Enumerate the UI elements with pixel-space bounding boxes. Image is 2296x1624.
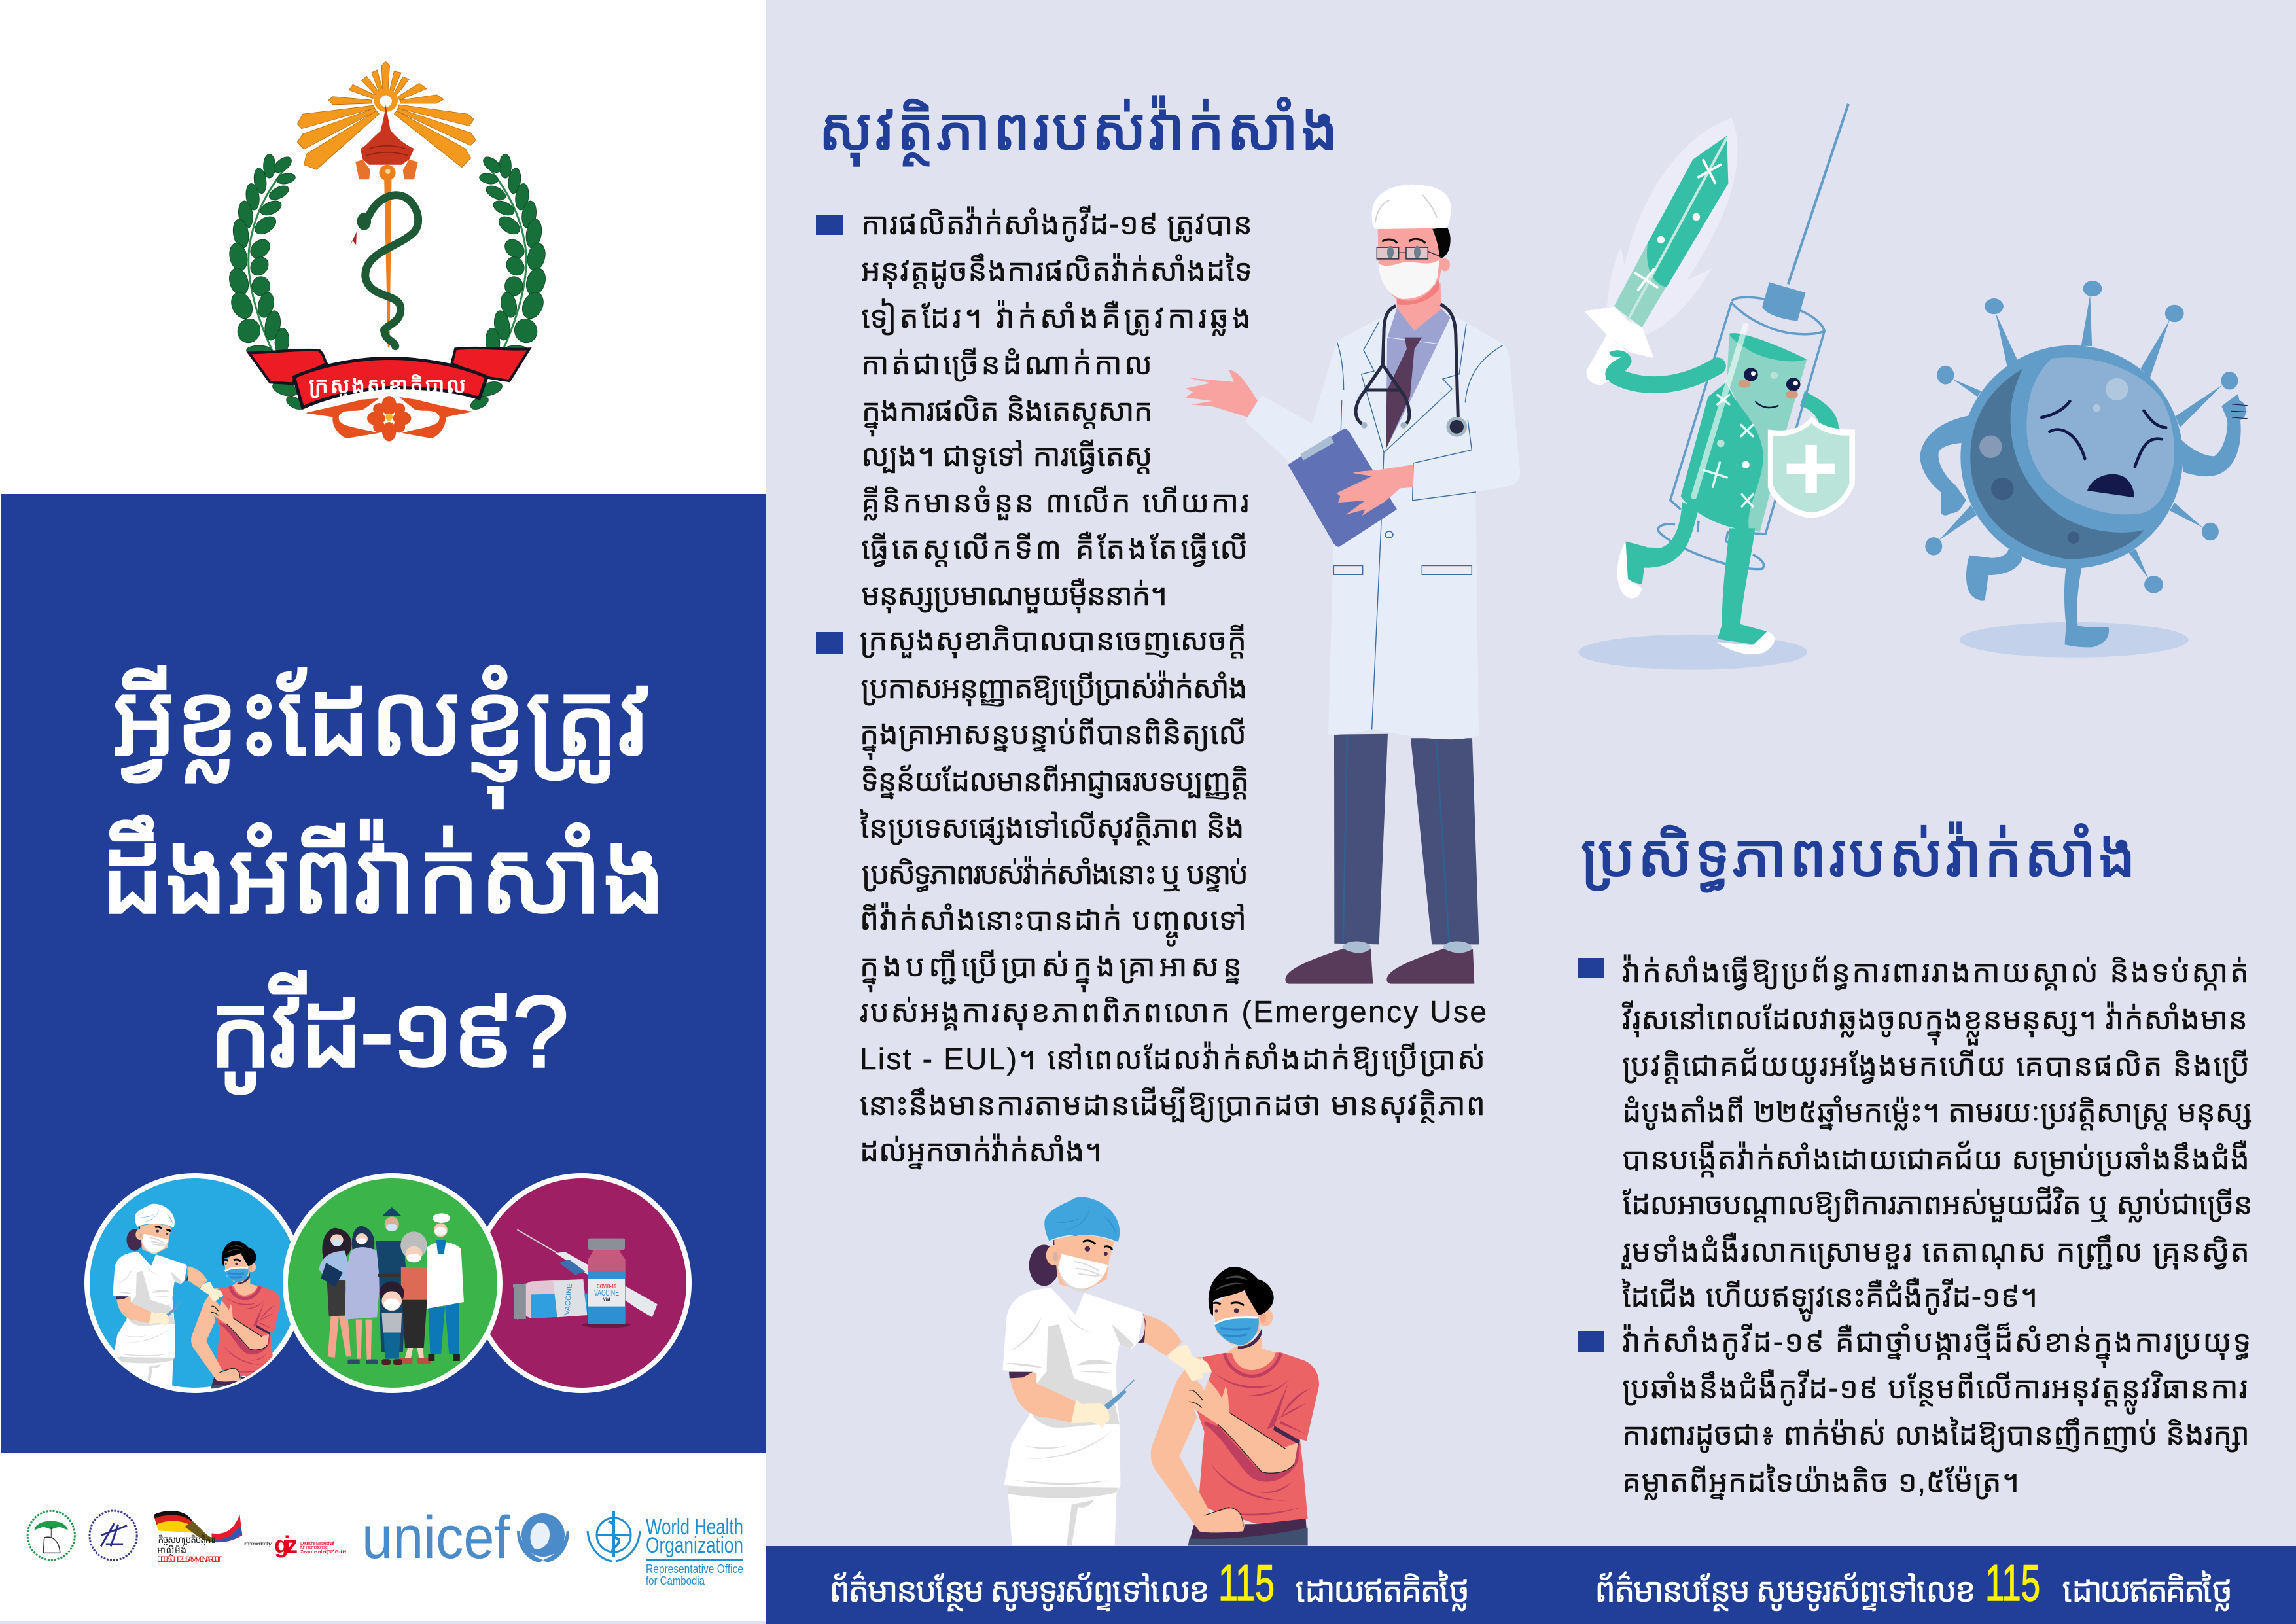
laurel: left xyxy=(226,154,306,412)
text block: effectiveness paragraph 1: វីរុសនៅពេលដែលវាឆ្លងចូលក្នុងខ្លួនមនុស្ស។ វ៉ាក់សាំងមាន xyxy=(1622,1000,2248,1046)
text block: safety paragraph 1: ធ្វើតេស្តលើកទី៣ គឺតែងតែធ្វើលើ xyxy=(861,531,1248,567)
text block: effectiveness paragraph 1: ដំបូងតាំងពី ២២៥ឆ្នាំមកម្ល៉េះ។ តាមរយៈប្រវត្តិសាស្ត្រ មនុស្ស xyxy=(1622,1095,2252,1131)
text block: effectiveness paragraph 1: ដៃជើង ហើយឥឡូវនេះគឺជំងឺកូវីដ-១៩។ xyxy=(1622,1277,2038,1322)
officer xyxy=(376,1241,406,1352)
logo row xyxy=(27,1511,242,1560)
main title: ដឹងអំពីវ៉ាក់សាំង xyxy=(100,815,666,934)
heading: vaccine effectiveness: ប្រសិទ្ធភាពរបស់វ៉ាក់សាំង xyxy=(1581,821,2136,892)
logo: Ministry of Health crest xyxy=(226,61,549,441)
logo: German flag swoosh xyxy=(154,1511,242,1542)
logo: unicef wordmark: unicef xyxy=(362,1504,510,1571)
text block: safety paragraph 2 xyxy=(860,623,1487,1170)
text: German cooperation: អាល្លឺម៉ង់ xyxy=(157,1545,186,1556)
text block: effectiveness paragraph 1: រួមទាំងជំងឺរលាកស្រោមខួរ តេតាណុស កញ្រ្ជឹល គ្រុនស្វិត xyxy=(1622,1232,2250,1270)
footer hotline: left: ព័ត៌មានបន្ថែម សូមទូរស័ព្ទទៅលេខ xyxy=(829,1571,1210,1611)
logo: unicef emblem xyxy=(517,1513,569,1562)
logo: giz: für Internationale xyxy=(300,1545,328,1550)
illustration: sad virus character xyxy=(1920,281,2248,658)
text block: effectiveness paragraph 1: បានបង្កើតវ៉ាក់សាំងដោយជោគជ័យ សម្រាប់ប្រឆាំងនឹងជំងឺ xyxy=(1622,1140,2250,1178)
text block: safety paragraph 2: ទិន្នន័យដែលមានពីអាជ្ញាធរបទប្បញ្ញត្តិ xyxy=(860,764,1249,800)
text block: safety paragraph 1 xyxy=(861,205,1252,613)
ribbon text: ក្រសួងសុខាភិបាល xyxy=(309,374,466,398)
text block: safety paragraph 2: List - EUL)។ នៅពេលដែលវ៉ាក់សាំងដាក់ឱ្យប្រើប្រាស់ xyxy=(860,1041,1485,1077)
text block: safety paragraph 2: ប្រកាសអនុញ្ញាតឱ្យប្រើប្រាស់វ៉ាក់សាំង xyxy=(861,670,1248,707)
text block: safety paragraph 1: ការផលិតវ៉ាក់សាំងកូវីដ-១៩ ត្រូវបាន xyxy=(861,205,1252,243)
text block: safety paragraph 2: ពីវ៉ាក់សាំងនោះបានដាក់ បញ្ចូលទៅ xyxy=(860,902,1246,947)
text block: safety paragraph 1: កាត់ជាច្រើនដំណាក់កាល xyxy=(861,347,1152,382)
text block: effectiveness paragraph 2: ការពារដូចជា៖ ពាក់ម៉ាស់ លាងដៃឱ្យបានញឹកញាប់ និងរក្សា xyxy=(1622,1417,2250,1453)
text block: safety paragraph 2: នៃប្រទេសផ្សេងទៅលើសុវត្ថិភាព និង xyxy=(860,809,1245,846)
footer hotline: right: 115 xyxy=(1985,1554,2040,1612)
text: World Health Organization xyxy=(646,1515,743,1587)
panel: blue title panel xyxy=(1,494,766,1453)
doctor xyxy=(428,1302,459,1354)
text block: safety paragraph 2: ក្នុងបញ្ជីប្រើប្រាស់ក្នុងគ្រាអាសន្ន xyxy=(860,949,1242,992)
text block: safety paragraph 1: គ្លីនិកមានចំនួន ៣លើក ហើយការ xyxy=(861,485,1249,521)
footer hotline: left: 115 xyxy=(1218,1554,1275,1612)
main title: កូវីដ-១៩? xyxy=(208,971,569,1094)
illustration: syringe hero with sword and shield xyxy=(1578,104,1855,670)
text block: safety paragraph 2: ប្រសិទ្ធភាពរបស់វ៉ាក់សាំងនោះ ឬ បន្ទាប់ xyxy=(862,856,1248,892)
text block: effectiveness paragraph 1: វ៉ាក់សាំងធ្វើឱ្យប្រព័ន្ធការពាររាងកាយស្គាល់ និងទប់ស្កាត់ xyxy=(1622,954,2249,991)
text: World Health Organization: Organization xyxy=(646,1533,743,1558)
circle: vaccine vials on purple: Vial xyxy=(603,1298,610,1302)
snake xyxy=(365,195,418,346)
text: German cooperation: កិច្ចសហប្រតិបត្តិការ xyxy=(158,1534,215,1545)
staff xyxy=(384,175,392,347)
crown xyxy=(361,105,414,165)
footer hotline: right: ដោយឥតគិតថ្លៃ xyxy=(2062,1570,2233,1611)
logo: giz: Deutsche Gesellschaft xyxy=(300,1542,334,1546)
text block: safety paragraph 1: ល្បង។ ជាទូទៅ ការធ្វើតេស្ត xyxy=(861,438,1152,474)
grandmother xyxy=(400,1231,427,1259)
circle: vaccine vials on purple xyxy=(474,1176,689,1390)
main title xyxy=(100,663,666,1094)
child xyxy=(380,1281,404,1305)
logo: giz: Zusammenarbeit (GIZ) GmbH xyxy=(300,1550,346,1555)
logo: green umbrella seal xyxy=(27,1511,75,1560)
bullet 1 xyxy=(816,215,843,235)
laurel: right xyxy=(468,154,549,412)
woman with folder xyxy=(322,1228,351,1263)
text block: safety paragraph 2: នោះនឹងមានការតាមដានដើម្បីឱ្យប្រាកដថា មានសុវត្ថិភាព xyxy=(860,1086,1485,1123)
logo: giz: giz xyxy=(274,1531,298,1558)
illustration: doctor xyxy=(1185,185,1520,984)
footer hotline: left xyxy=(829,1554,1470,1612)
text block: effectiveness paragraph 2: គម្លាតពីអ្នកដទៃយ៉ាងតិច ១,៥ម៉ែត្រ។ xyxy=(1622,1464,2019,1500)
text block: effectiveness paragraph 2: វ៉ាក់សាំងកូវីដ-១៩ គឺជាថ្នាំបង្ការថ្មីដ៏សំខាន់ក្នុងការប្រយុទ្ធ xyxy=(1622,1322,2251,1368)
text block: safety paragraph 1: មនុស្សប្រមាណមួយម៉ឺននាក់។ xyxy=(861,577,1167,613)
text block: safety paragraph 2: ក្នុងគ្រាអាសន្នបន្ទាប់ពីបានពិនិត្យលើ xyxy=(860,716,1246,760)
text: World Health Organization: Representative Office xyxy=(646,1562,743,1576)
text block: safety paragraph 1: ទៀតដែរ។ វ៉ាក់សាំងគឺត្រូវការឆ្លង xyxy=(861,298,1251,336)
text: German cooperation xyxy=(157,1534,222,1564)
woman in dress xyxy=(352,1226,374,1251)
circle: community group on green xyxy=(285,1176,500,1390)
text block: safety paragraph 1: ក្នុងការផលិត និងតេស្តសាក xyxy=(862,393,1153,436)
text block: safety paragraph 2: ដល់អ្នកចាក់វ៉ាក់សាំង។ xyxy=(860,1133,1102,1170)
ribbon band xyxy=(294,359,487,408)
text block: effectiveness paragraph 1 xyxy=(1622,954,2253,1322)
ribbon tails xyxy=(249,350,327,383)
panel: left white column xyxy=(0,0,766,1621)
logo: giz: Implemented by xyxy=(244,1541,272,1547)
text block: safety paragraph 1: អនុវត្តដូចនឹងការផលិតវ៉ាក់សាំងដទៃ xyxy=(861,253,1252,289)
bullet 3 xyxy=(1578,958,1604,978)
main title: អ្វីខ្លះដែលខ្ញុំត្រូវ xyxy=(112,663,651,809)
bullet 2 xyxy=(816,632,843,654)
ornament xyxy=(305,396,473,441)
circle: vaccine vials on purple: VACCINE xyxy=(594,1288,619,1297)
illustration: nurse vaccinating patient xyxy=(1003,1197,1319,1545)
text block: effectiveness paragraph 1: ដែលអាចបណ្តាលឱ្យពិការភាពអស់មួយជីវិត ឬ ស្លាប់ជាច្រើន xyxy=(1623,1186,2253,1223)
sun rays xyxy=(297,61,476,169)
text block: effectiveness paragraph 1: ប្រវត្តិជោគជ័យយូរអង្វែងមកហើយ គេបានផលិត និងប្រើ xyxy=(1622,1048,2250,1084)
circle: nurse vaccinating on blue xyxy=(87,1176,302,1390)
text block: effectiveness paragraph 2 xyxy=(1622,1322,2251,1500)
bullet 4 xyxy=(1578,1331,1604,1352)
text block: effectiveness paragraph 2: ប្រឆាំងនឹងជំងឺកូវីដ-១៩ បន្ថែមពីលើការអនុវត្តន្លូវវិធានការ xyxy=(1622,1369,2248,1415)
text block: safety paragraph 2: ក្រសួងសុខាភិបាលបានចេញសេចក្តី xyxy=(860,623,1246,659)
text: German cooperation: DELTSCHE ZUSAMMENARBEIT xyxy=(157,1555,222,1564)
footer hotline: right xyxy=(1595,1554,2233,1612)
logo: giz xyxy=(244,1531,346,1558)
heading: vaccine safety: សុវត្ថិភាពរបស់វ៉ាក់សាំង xyxy=(819,95,1338,166)
text: World Health Organization: for Cambodia xyxy=(646,1574,705,1587)
circle: vaccine vials on purple: VACCINE xyxy=(563,1283,574,1315)
footer hotline: right: ព័ត៌មានបន្ថែម សូមទូរស័ព្ទទៅលេខ xyxy=(1595,1571,1976,1611)
footer hotline: left: ដោយឥតគិតថ្លៃ xyxy=(1295,1570,1470,1611)
logo: WHO emblem xyxy=(588,1511,640,1561)
logo: blue seal xyxy=(90,1511,137,1560)
text block: safety paragraph 2: របស់អង្គការសុខភាពពិភពលោក (Emergency Use xyxy=(860,995,1487,1031)
footer bar xyxy=(766,1546,2296,1624)
text: World Health Organization: World Health xyxy=(646,1515,743,1540)
circle: vaccine vials on purple: COVID-19 xyxy=(597,1283,616,1290)
